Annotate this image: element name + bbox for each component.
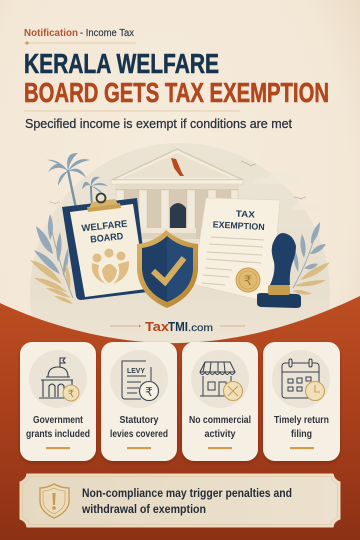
brand: Tax (145, 319, 170, 334)
rupee coin: ₹ (244, 273, 252, 288)
kicker: - Income Tax (80, 28, 134, 39)
hero backdrop disc (30, 143, 330, 443)
clipboard (62, 194, 148, 300)
label: No commercial (189, 414, 251, 426)
card: statutory levies (101, 342, 177, 461)
card: government grants: ₹ (68, 389, 74, 400)
card: timely return filing: filing (291, 428, 312, 440)
document heading: TAX (236, 209, 255, 220)
warning banner: withdrawal of exemption (81, 502, 206, 516)
card: government grants: grants included (26, 428, 90, 440)
title: KERALA WELFARE (24, 48, 219, 79)
label: Timely return (274, 414, 329, 426)
icon: shop (200, 362, 235, 396)
title (24, 48, 329, 108)
building (111, 149, 243, 239)
clipboard label (81, 219, 129, 246)
card: government grants (20, 342, 96, 461)
subtitle: Specified income is exempt if conditions are met (25, 116, 292, 131)
rust swoosh background (0, 296, 360, 540)
icon: calendar (282, 359, 319, 398)
document heading: EXEMPTION (212, 219, 265, 232)
kicker (24, 27, 134, 39)
icon: warning shield (40, 484, 69, 518)
clouds and birds (49, 161, 322, 210)
right plant (293, 222, 330, 295)
card: statutory levies: levies covered (110, 428, 168, 440)
icon: people in hands (92, 248, 129, 284)
stamp (257, 233, 301, 308)
tax exemption document (193, 198, 280, 303)
palm trees (46, 153, 108, 208)
warning banner (20, 474, 340, 527)
card: no commercial activity (182, 342, 258, 461)
shield (137, 230, 198, 308)
clip (87, 203, 121, 212)
document heading (212, 207, 266, 232)
brand (110, 319, 245, 334)
brand: TMI (168, 319, 188, 334)
card: statutory levies: ₹ (145, 385, 153, 399)
clipboard label: BOARD (90, 231, 124, 246)
icon: levy document (122, 361, 151, 399)
clipboard label: WELFARE (81, 219, 128, 234)
label: Statutory (120, 414, 159, 426)
brand: .com (188, 322, 213, 334)
check mark (153, 258, 184, 282)
label: Government (33, 414, 83, 426)
warning text: Non-compliance may trigger penalties and (82, 486, 292, 500)
map of Kerala on pediment (171, 158, 184, 176)
icon: government building (39, 358, 73, 398)
card: statutory levies: LEVY (127, 368, 145, 375)
card: no commercial activity: activity (204, 428, 236, 440)
left plant (30, 214, 73, 304)
kicker: Notification (24, 27, 78, 39)
card: timely return filing (263, 342, 340, 461)
